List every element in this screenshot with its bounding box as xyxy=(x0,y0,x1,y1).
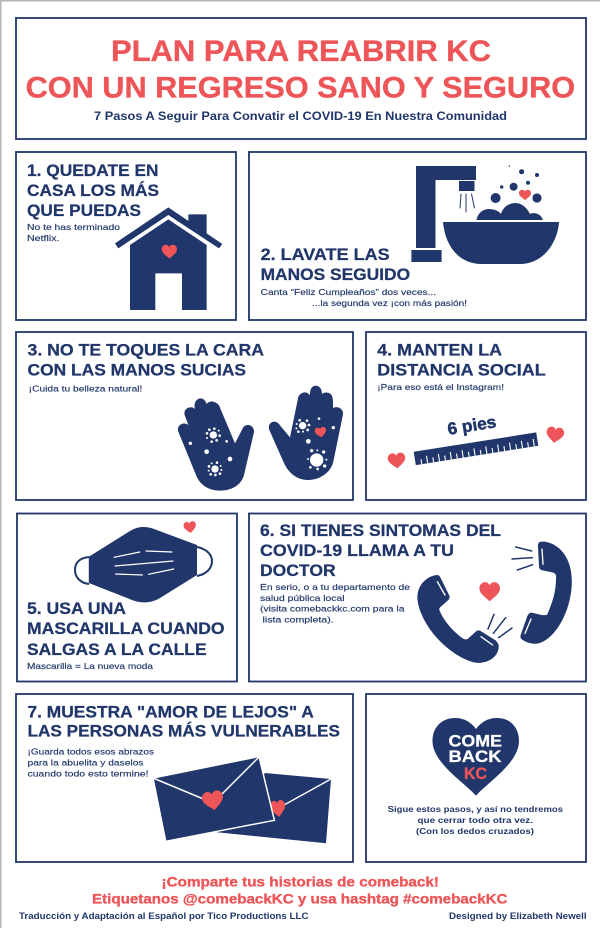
heading xyxy=(27,162,159,220)
icon: right phone xyxy=(520,542,572,644)
logo: comeback KC heart: BACK xyxy=(448,747,502,766)
heading xyxy=(28,703,340,740)
panel: step 5 mask xyxy=(17,514,237,682)
text block xyxy=(261,287,467,308)
icon: left heart xyxy=(387,452,406,469)
text block: ¡Guarda todos esos abrazos xyxy=(28,747,154,757)
panel: comeback logo xyxy=(366,694,586,862)
heading: SALGAS A LA CALLE xyxy=(27,641,207,659)
credit: translation: Traducción y Adaptación al Español por Tico Productions LLC xyxy=(19,911,309,921)
text block: Sigue estos pasos, y así no tendremos xyxy=(388,804,563,814)
heading: QUE PUEDAS xyxy=(27,202,141,220)
heading: 6. SI TIENES SINTOMAS DEL xyxy=(260,522,501,540)
text block: cuando todo esto termine! xyxy=(28,769,148,779)
text block: (visita comebackkc.com para la xyxy=(260,604,405,614)
call to action xyxy=(92,873,508,907)
panel: step 6 call doctor xyxy=(249,514,586,682)
text block: ¡Cuida tu belleza natural! xyxy=(29,384,142,394)
text block xyxy=(388,804,563,836)
icon: heart xyxy=(479,582,500,601)
panel: title xyxy=(16,18,586,139)
text block: (Con los dedos cruzados) xyxy=(416,826,534,836)
heading: DOCTOR xyxy=(260,562,336,580)
label: 6 pies: 6 pies xyxy=(446,412,498,439)
heading: MANOS SEGUIDO xyxy=(261,266,410,284)
text block xyxy=(260,582,410,625)
heading: DISTANCIA SOCIAL xyxy=(377,362,546,380)
panel: step 4 social distance xyxy=(366,332,586,500)
panel: step 2 wash hands xyxy=(249,152,586,320)
icon: front envelope xyxy=(153,756,274,841)
subtitle: 7 Pasos A Seguir Para Convatir el COVID-19 En Nuestra Comunidad xyxy=(94,111,507,123)
heading: COVID-19 LLAMA A TU xyxy=(260,542,454,560)
text block: ¡Para eso está el Instagram! xyxy=(377,382,504,392)
heading xyxy=(261,246,410,284)
title: PLAN PARA REABRIR KC xyxy=(111,35,491,68)
heading: CON LAS MANOS SUCIAS xyxy=(28,362,246,380)
text block: lista completa). xyxy=(262,615,334,625)
text block: ...la segunda vez ¡con más pasión! xyxy=(312,298,467,308)
icon: right hand with germs and heart xyxy=(269,386,343,480)
logo: comeback KC heart: KC xyxy=(464,764,487,783)
heading: 4. MANTEN LA xyxy=(377,342,502,360)
text block: Canta “Feliz Cumpleaños” dos veces... xyxy=(261,287,436,297)
text block: para la abuelita y daselos xyxy=(28,758,144,768)
text block: que cerrar todo otra vez. xyxy=(418,815,533,825)
heading: LAS PERSONAS MÁS VULNERABLES xyxy=(28,721,340,740)
panel: step 1 stay home xyxy=(16,152,236,320)
heading xyxy=(377,342,546,380)
icon: faucet and bowl xyxy=(411,165,559,264)
title xyxy=(26,35,575,104)
heading xyxy=(28,342,264,380)
text block xyxy=(27,222,120,243)
icon: house xyxy=(115,207,222,310)
logo: comeback KC heart xyxy=(432,718,519,796)
credit: designer: Designed by Elizabeth Newell xyxy=(449,911,587,921)
heading: 7. MUESTRA "AMOR DE LEJOS" A xyxy=(28,703,314,721)
icon: back envelope xyxy=(217,773,331,843)
text block xyxy=(28,747,154,779)
icon: heart xyxy=(183,521,197,534)
heading xyxy=(27,600,225,659)
text block: salud pública local xyxy=(260,593,345,603)
heading: 2. LAVATE LAS xyxy=(261,246,390,264)
text block: No te has terminado xyxy=(27,222,120,232)
call to action: Etiquetanos @comebackKC y usa hashtag #comebackKC xyxy=(92,891,508,907)
icon: ringing lines xyxy=(488,547,533,638)
heading xyxy=(260,522,501,580)
icon: left hand with germs xyxy=(178,398,254,491)
heading: 1. QUEDATE EN xyxy=(27,162,158,180)
icon: right heart xyxy=(545,426,565,444)
text block: Netflix. xyxy=(27,233,60,243)
icon: face mask xyxy=(75,527,212,602)
text block: Mascarilla = La nueva moda xyxy=(27,661,153,671)
title: CON UN REGRESO SANO Y SEGURO xyxy=(26,72,575,104)
text block: En serio, o a tu departamento de xyxy=(260,582,410,592)
heading: 3. NO TE TOQUES LA CARA xyxy=(28,342,264,360)
heading: 5. USA UNA xyxy=(27,600,126,618)
panel: step 7 love from afar xyxy=(16,694,353,862)
heading: MASCARILLA CUANDO xyxy=(27,620,225,638)
panel: step 3 do not touch face xyxy=(16,332,353,500)
call to action: ¡Comparte tus historias de comeback! xyxy=(162,873,439,889)
icon: ruler xyxy=(414,432,538,465)
icon: left phone xyxy=(417,575,499,663)
logo: comeback KC heart: COME xyxy=(448,731,502,750)
heading: CASA LOS MÁS xyxy=(27,181,159,200)
